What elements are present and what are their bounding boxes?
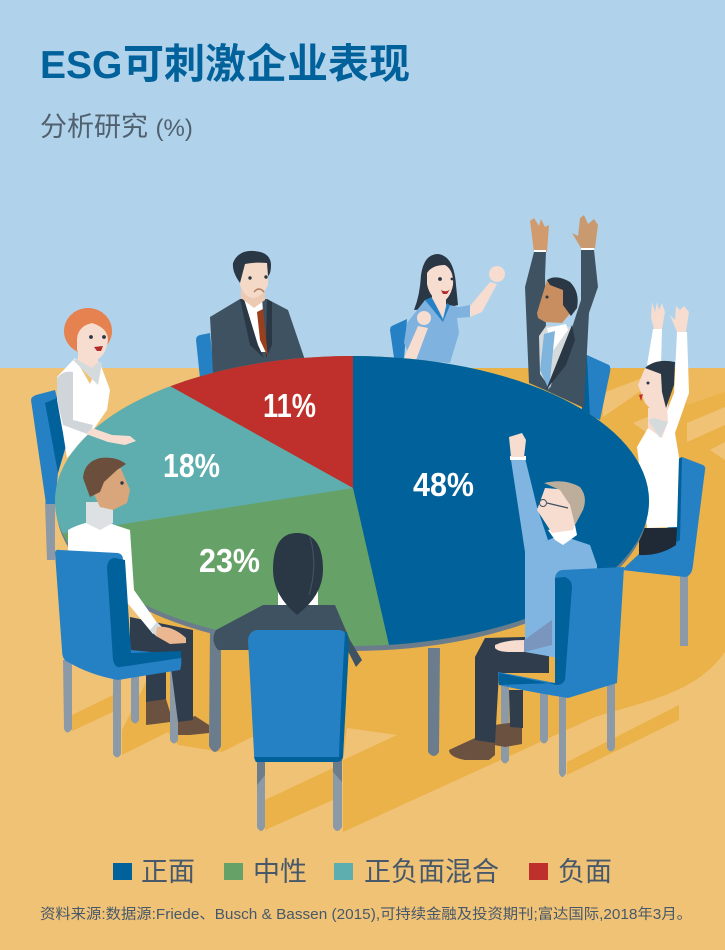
person: man in dark suit with raised arms — [525, 215, 610, 420]
background: floor — [0, 368, 725, 950]
legend item: neutral — [224, 857, 307, 887]
legend item: neutral: 中性 — [253, 857, 307, 887]
table leg right — [428, 648, 440, 756]
table leg left — [209, 630, 221, 752]
value 23%: 23% — [199, 542, 260, 579]
legend item: positive — [113, 857, 195, 887]
title: 可刺激企业表现 — [123, 41, 410, 87]
legend — [113, 857, 612, 887]
hand: red-haired woman's hand — [86, 428, 136, 445]
legend item: positive: 正面 — [141, 857, 195, 887]
pie chart table — [55, 356, 649, 756]
person: woman from behind with chair — [213, 533, 362, 831]
pie slices — [55, 356, 649, 646]
table rim — [56, 361, 648, 651]
person: dark-suited man with red tie and chair — [196, 251, 305, 378]
value 11%: 11% — [263, 387, 316, 424]
person: man with glasses raising fist and chair — [449, 433, 624, 777]
title: ESG — [40, 44, 122, 87]
person: cheering woman in blue — [390, 254, 505, 363]
value 18%: 18% — [163, 447, 220, 484]
person: man in white from behind-left with chair — [55, 458, 209, 758]
person: woman in white with raised arms and chair — [622, 302, 705, 646]
background: sky — [0, 0, 725, 368]
legend item: negative — [529, 857, 612, 887]
subtitle: 分析研究 (%) — [40, 112, 193, 142]
legend item: mixed: 正负面混合 — [364, 857, 499, 887]
value 48%: 48% — [413, 466, 474, 503]
person: red-haired woman with chair — [31, 308, 112, 560]
source note: 资料来源:数据源:Friede、Busch & Bassen (2015),可持续金融及投资期刊;富达国际,2018年3月。 — [40, 905, 692, 923]
legend item: negative: 负面 — [558, 857, 612, 887]
